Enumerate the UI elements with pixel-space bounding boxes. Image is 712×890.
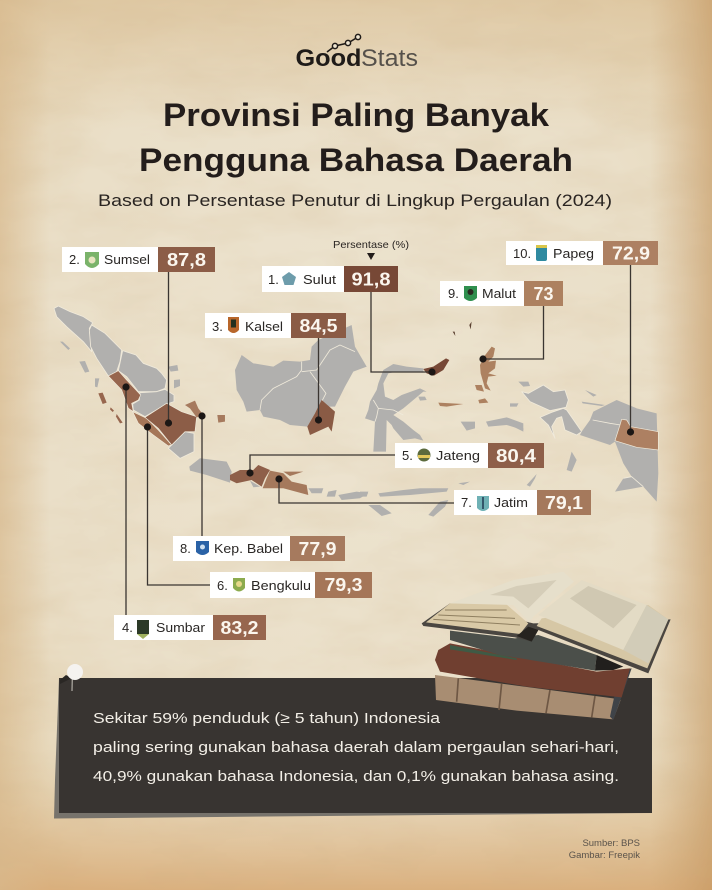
label: 6 Bengkulu: 79,3 (324, 575, 362, 595)
logo: GoodStats (296, 34, 418, 72)
map: Sumatra (54, 306, 225, 458)
label: 2 Sumsel: 2. (69, 252, 80, 267)
label: 5 Jateng: 80,4 (496, 446, 536, 466)
label: 2 Sumsel: 87,8 (167, 250, 206, 270)
label: 8 Kep. Babel: Kep. Babel (214, 541, 283, 556)
label: 1 Sulut: Sulut (303, 272, 336, 287)
pin (60, 664, 83, 691)
label: 9 Malut: Malut (482, 286, 516, 301)
title: Pengguna Bahasa Daerah (139, 142, 573, 178)
subtitle: Based on Persentase Penutur di Lingkup Pergaulan (2024) (98, 192, 612, 210)
label: 1 Sulut: 1. (268, 272, 279, 287)
text: summary: paling sering gunakan bahasa daerah dalam pergaulan sehari-hari, (93, 739, 619, 756)
label: 3 Kalsel: 3. (212, 319, 223, 334)
label: 10 Papeg (506, 241, 658, 265)
label: 7 Jatim: 7. (461, 495, 472, 510)
source credits: Sumber: BPS (582, 838, 640, 849)
label: 8 Kep. Babel: 77,9 (298, 539, 336, 559)
label: 5 Jateng: 5. (402, 448, 413, 463)
map: Java and Nusa Tenggara (189, 458, 368, 500)
red-brown book (435, 643, 630, 697)
map: Kalimantan (235, 325, 367, 435)
label: 4 Sumbar: 83,2 (220, 618, 258, 638)
label: 9 Malut: 73 (534, 284, 554, 304)
label: 3 Kalsel: 84,5 (300, 316, 338, 336)
label: 3 Kalsel (205, 313, 346, 338)
label: 9 Malut: 9. (448, 286, 459, 301)
label: 9 Malut (440, 281, 563, 306)
right page block (537, 605, 668, 668)
label: 4 Sumbar (114, 615, 266, 640)
connector lines and dots (122, 265, 634, 615)
label: 6 Bengkulu (210, 572, 372, 598)
label: 4 Sumbar: Sumbar (156, 620, 206, 635)
open book cover (422, 603, 671, 673)
spine shadow (517, 627, 538, 642)
label: 2 Sumsel: Sumsel (104, 252, 150, 267)
legend: Persentase (%) (333, 239, 409, 260)
title: Provinsi Paling Banyak (163, 97, 549, 133)
label: 10 Papeg: 10. (513, 246, 531, 261)
label: 10 Papeg: 72,9 (612, 244, 650, 264)
label: 8 Kep. Babel (173, 536, 345, 561)
logo: GoodStats: Good (296, 45, 362, 72)
label: 5 Jateng: Jateng (436, 448, 480, 463)
map: Sulawesi (360, 358, 449, 452)
map: Maluku and small islands (360, 322, 523, 517)
legend: Persentase (%): Persentase (%) (333, 239, 409, 251)
label: 6 Bengkulu: 6. (217, 578, 228, 593)
label: 8 Kep. Babel: 8. (180, 541, 191, 556)
label: 7 Jatim: Jatim (494, 495, 528, 510)
map of Indonesia (54, 306, 658, 517)
left open page (450, 572, 574, 623)
label: 1 Sulut (262, 266, 398, 292)
logo: GoodStats: Stats (361, 45, 418, 72)
right open page (538, 580, 647, 650)
bottom tan book (435, 675, 621, 719)
left page block (426, 602, 528, 634)
source credits: Gambar: Freepik (569, 850, 640, 861)
text: summary (93, 710, 619, 785)
panel: summary callout (54, 678, 652, 818)
label: 2 Sumsel (62, 247, 215, 272)
illustration: stack of old books (422, 572, 671, 720)
map: Papua (510, 382, 658, 502)
text: summary: Sekitar 59% penduduk (≥ 5 tahun) Indonesia (93, 710, 441, 727)
label: 10 Papeg: Papeg (553, 246, 594, 261)
label: 7 Jatim: 79,1 (545, 493, 583, 513)
grey-green book (450, 631, 597, 671)
label: 5 Jateng (395, 443, 544, 468)
text: summary: 40,9% gunakan bahasa Indonesia, dan 0,1% gunakan bahasa asing. (93, 768, 619, 785)
label: 7 Jatim (454, 490, 591, 515)
label: 4 Sumbar: 4. (122, 620, 133, 635)
source credits (569, 838, 640, 861)
label: 6 Bengkulu: Bengkulu (251, 578, 311, 593)
label: 3 Kalsel: Kalsel (245, 319, 283, 334)
title (139, 97, 573, 178)
label: 1 Sulut: 91,8 (352, 270, 390, 290)
